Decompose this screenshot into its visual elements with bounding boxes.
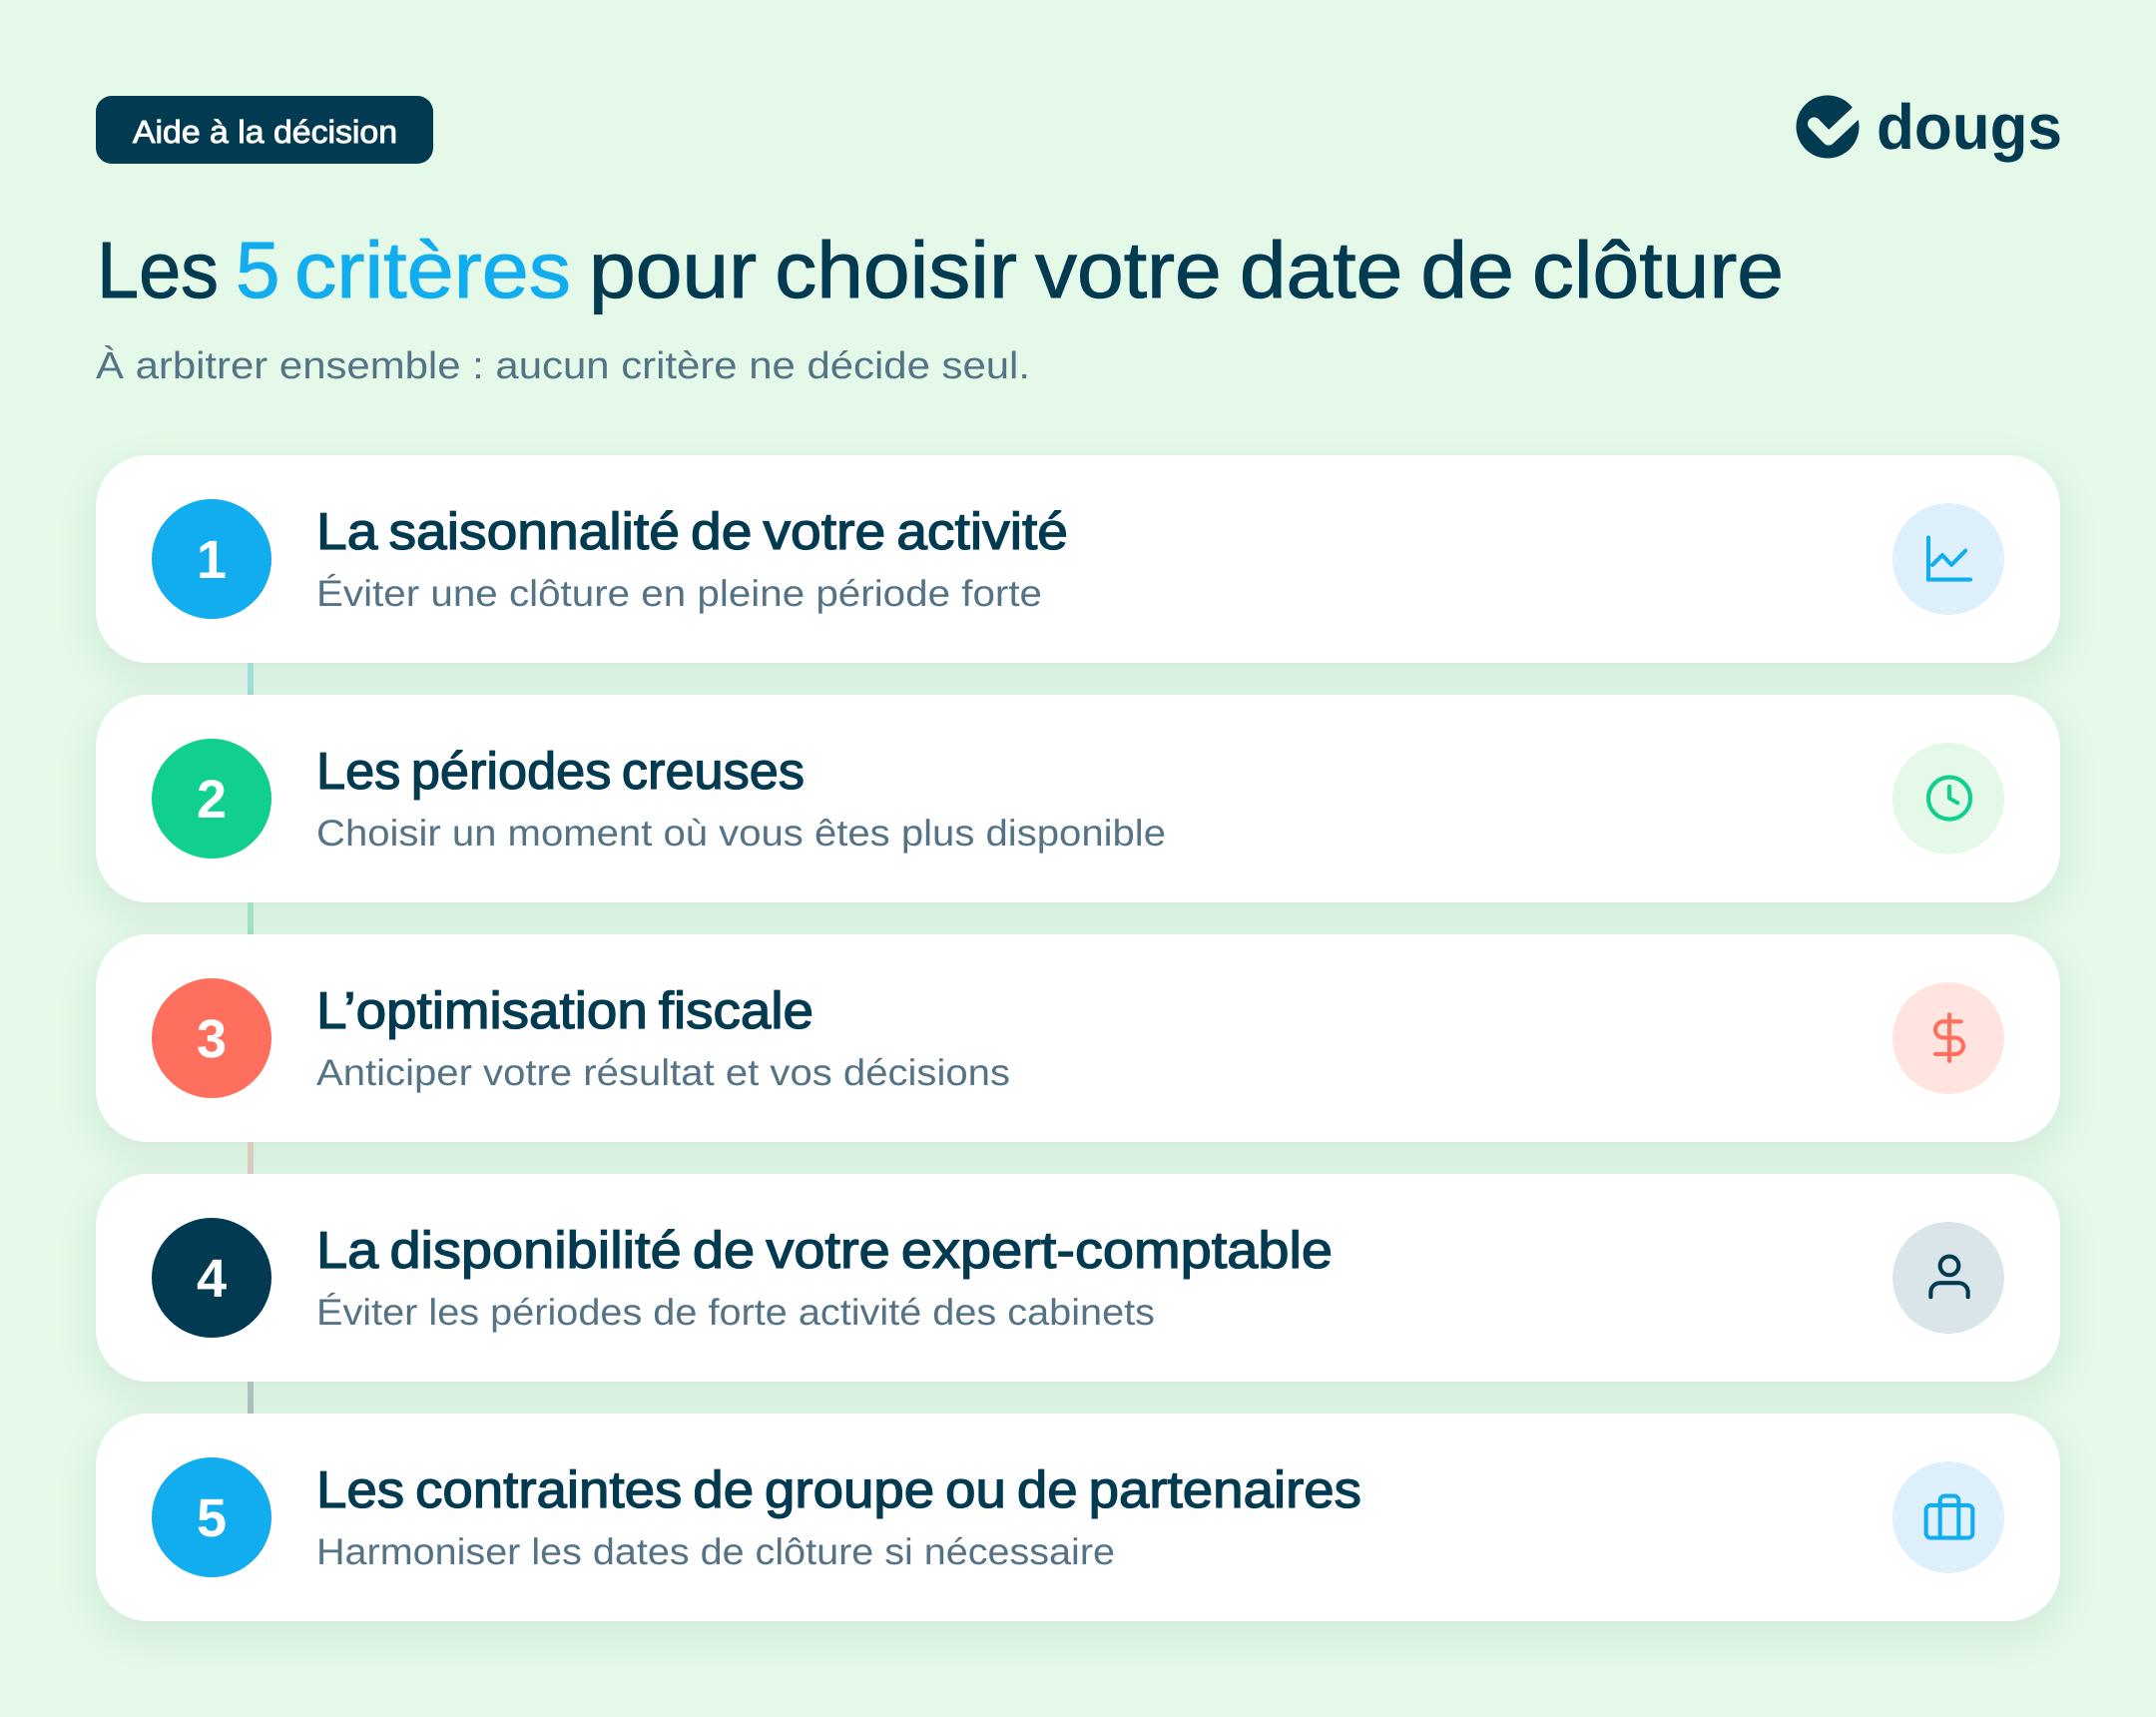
criterion description 3: Anticiper votre résultat et vos décisions (316, 1052, 1010, 1093)
icon: briefcase (1892, 1461, 2004, 1573)
title: pour choisir votre date de clôture (589, 226, 1784, 314)
number badge 3 (152, 978, 271, 1098)
panel: criterion 3 (96, 934, 2060, 1142)
number badge 4: 4 (197, 1249, 227, 1309)
criterion title 1: La saisonnalité de votre activité (316, 503, 1068, 561)
number badge 2 (152, 739, 271, 858)
panel: criterion 2 (96, 695, 2060, 902)
number badge 1 (152, 499, 271, 619)
criterion title 2: Les périodes creuses (316, 743, 805, 801)
icon: person (1892, 1222, 2004, 1334)
number badge 4 (152, 1218, 271, 1338)
icon: clock (1892, 743, 2004, 855)
subtitle: À arbitrer ensemble : aucun critère ne décide seul. (96, 345, 1030, 387)
criterion description 4: Éviter les périodes de forte activité des cabinets (316, 1292, 1155, 1333)
connector 1 (248, 663, 254, 695)
tag: Aide à la décision (96, 96, 433, 164)
criterion title 3: L’optimisation fiscale (316, 982, 813, 1040)
logo: dougs: dougs (1877, 91, 2062, 163)
icon: line chart (1892, 503, 2004, 615)
criterion description 2: Choisir un moment où vous êtes plus disponible (316, 813, 1166, 854)
number badge 5 (152, 1457, 271, 1577)
title (97, 226, 1784, 314)
panel: criterion 5 (96, 1414, 2060, 1621)
number badge 1: 1 (197, 530, 227, 590)
title: Les (97, 226, 219, 314)
criterion description 5: Harmoniser les dates de clôture si nécessaire (316, 1531, 1115, 1572)
criterion title 4: La disponibilité de votre expert-comptable (316, 1222, 1333, 1280)
connector 4 (248, 1382, 254, 1414)
icon: dollar (1892, 982, 2004, 1094)
number badge 2: 2 (197, 770, 227, 830)
logo: dougs (1797, 91, 2062, 163)
tag: Aide à la décision: Aide à la décision (133, 114, 397, 150)
header (96, 91, 2062, 387)
number badge 5: 5 (197, 1488, 227, 1548)
number badge 3: 3 (197, 1009, 227, 1069)
panel: criterion 4 (96, 1174, 2060, 1382)
criterion description 1: Éviter une clôture en pleine période forte (316, 573, 1042, 614)
connector 3 (248, 1142, 254, 1174)
connector 2 (248, 902, 254, 934)
title: critères (294, 226, 571, 314)
panel: criterion 1 (96, 455, 2060, 663)
title: 5 (236, 226, 279, 314)
criterion title 5: Les contraintes de groupe ou de partenaires (316, 1461, 1361, 1519)
